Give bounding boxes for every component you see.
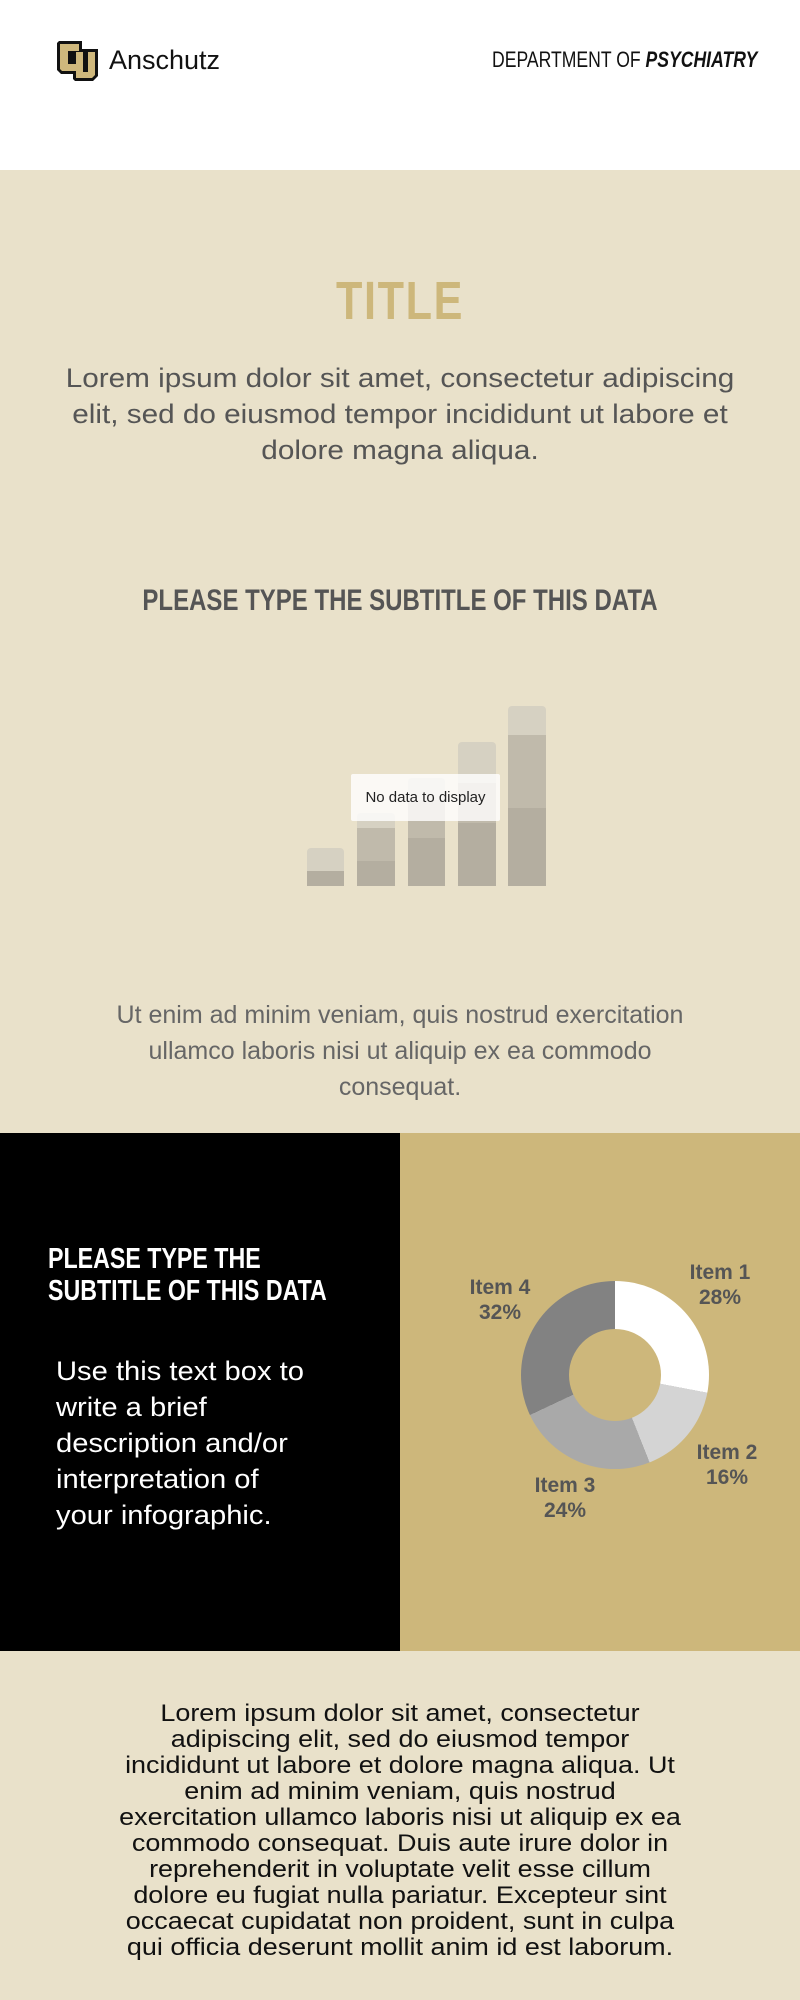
body paragraph	[119, 1700, 681, 1961]
body paragraph: Lorem ipsum dolor sit amet, consectetur	[160, 1700, 640, 1727]
label item 3: 24%	[544, 1499, 586, 1522]
body paragraph: incididunt ut labore et dolore magna aliqua. Ut	[125, 1752, 675, 1779]
description text: your infographic.	[56, 1500, 272, 1530]
logo: Anschutz	[109, 45, 220, 75]
body paragraph: adipiscing elit, sed do eiusmod tempor	[171, 1726, 629, 1753]
panel: description	[0, 1133, 400, 1651]
description text: description and/or	[56, 1428, 288, 1458]
body paragraph: dolore eu fugiat nulla pariatur. Excepteur sint	[133, 1882, 667, 1909]
department: DEPARTMENT OF PSYCHIATRY	[492, 47, 757, 72]
body paragraph: reprehenderit in voluptate velit esse cillum	[149, 1856, 651, 1883]
subtitle white: SUBTITLE OF THIS DATA	[48, 1275, 327, 1307]
description text	[56, 1356, 304, 1530]
intro text: Lorem ipsum dolor sit amet, consectetur adipiscing	[66, 363, 734, 393]
panel: donut chart	[400, 1133, 800, 1651]
label item 4	[470, 1276, 530, 1324]
body paragraph: exercitation ullamco laboris nisi ut aliquip ex ea	[119, 1804, 681, 1831]
intro text	[66, 363, 734, 465]
subtitle white: PLEASE TYPE THE	[48, 1243, 261, 1275]
tooltip: no data	[351, 774, 500, 821]
tooltip: no data: No data to display	[365, 789, 486, 806]
label item 3	[535, 1474, 595, 1522]
panel: footer text	[0, 1651, 800, 2000]
description text: Use this text box to	[56, 1356, 304, 1386]
header	[0, 0, 800, 170]
caption text: Ut enim ad minim veniam, quis nostrud exercitation ullamco laboris nisi ut aliquip ex ea commodo consequat.	[117, 1001, 683, 1101]
body paragraph: occaecat cupidatat non proident, sunt in culpa	[126, 1908, 674, 1935]
label item 1: Item 1	[690, 1261, 750, 1284]
logo	[57, 41, 220, 81]
donut	[521, 1281, 709, 1469]
label item 3: Item 3	[535, 1474, 595, 1497]
label item 4: Item 4	[470, 1276, 530, 1299]
title: TITLE	[336, 271, 464, 331]
label item 2: 16%	[706, 1466, 748, 1489]
subtitle white	[48, 1243, 327, 1307]
panel: intro	[0, 170, 800, 1133]
body paragraph: commodo consequat. Duis aute irure dolor in	[132, 1830, 668, 1857]
description text: interpretation of	[56, 1464, 259, 1494]
intro text: elit, sed do eiusmod tempor incididunt ut labore et	[72, 399, 728, 429]
label item 1: 28%	[699, 1286, 741, 1309]
body paragraph: qui officia deserunt mollit anim id est laborum.	[127, 1934, 673, 1961]
label item 2: Item 2	[697, 1441, 757, 1464]
body paragraph: enim ad minim veniam, quis nostrud	[184, 1778, 616, 1805]
label item 2	[697, 1441, 757, 1489]
intro text: dolore magna aliqua.	[261, 435, 539, 465]
subtitle: PLEASE TYPE THE SUBTITLE OF THIS DATA	[142, 584, 658, 617]
description text: write a brief	[56, 1392, 207, 1422]
label item 4: 32%	[479, 1301, 521, 1324]
label item 1	[690, 1261, 750, 1309]
bar chart	[307, 706, 546, 886]
